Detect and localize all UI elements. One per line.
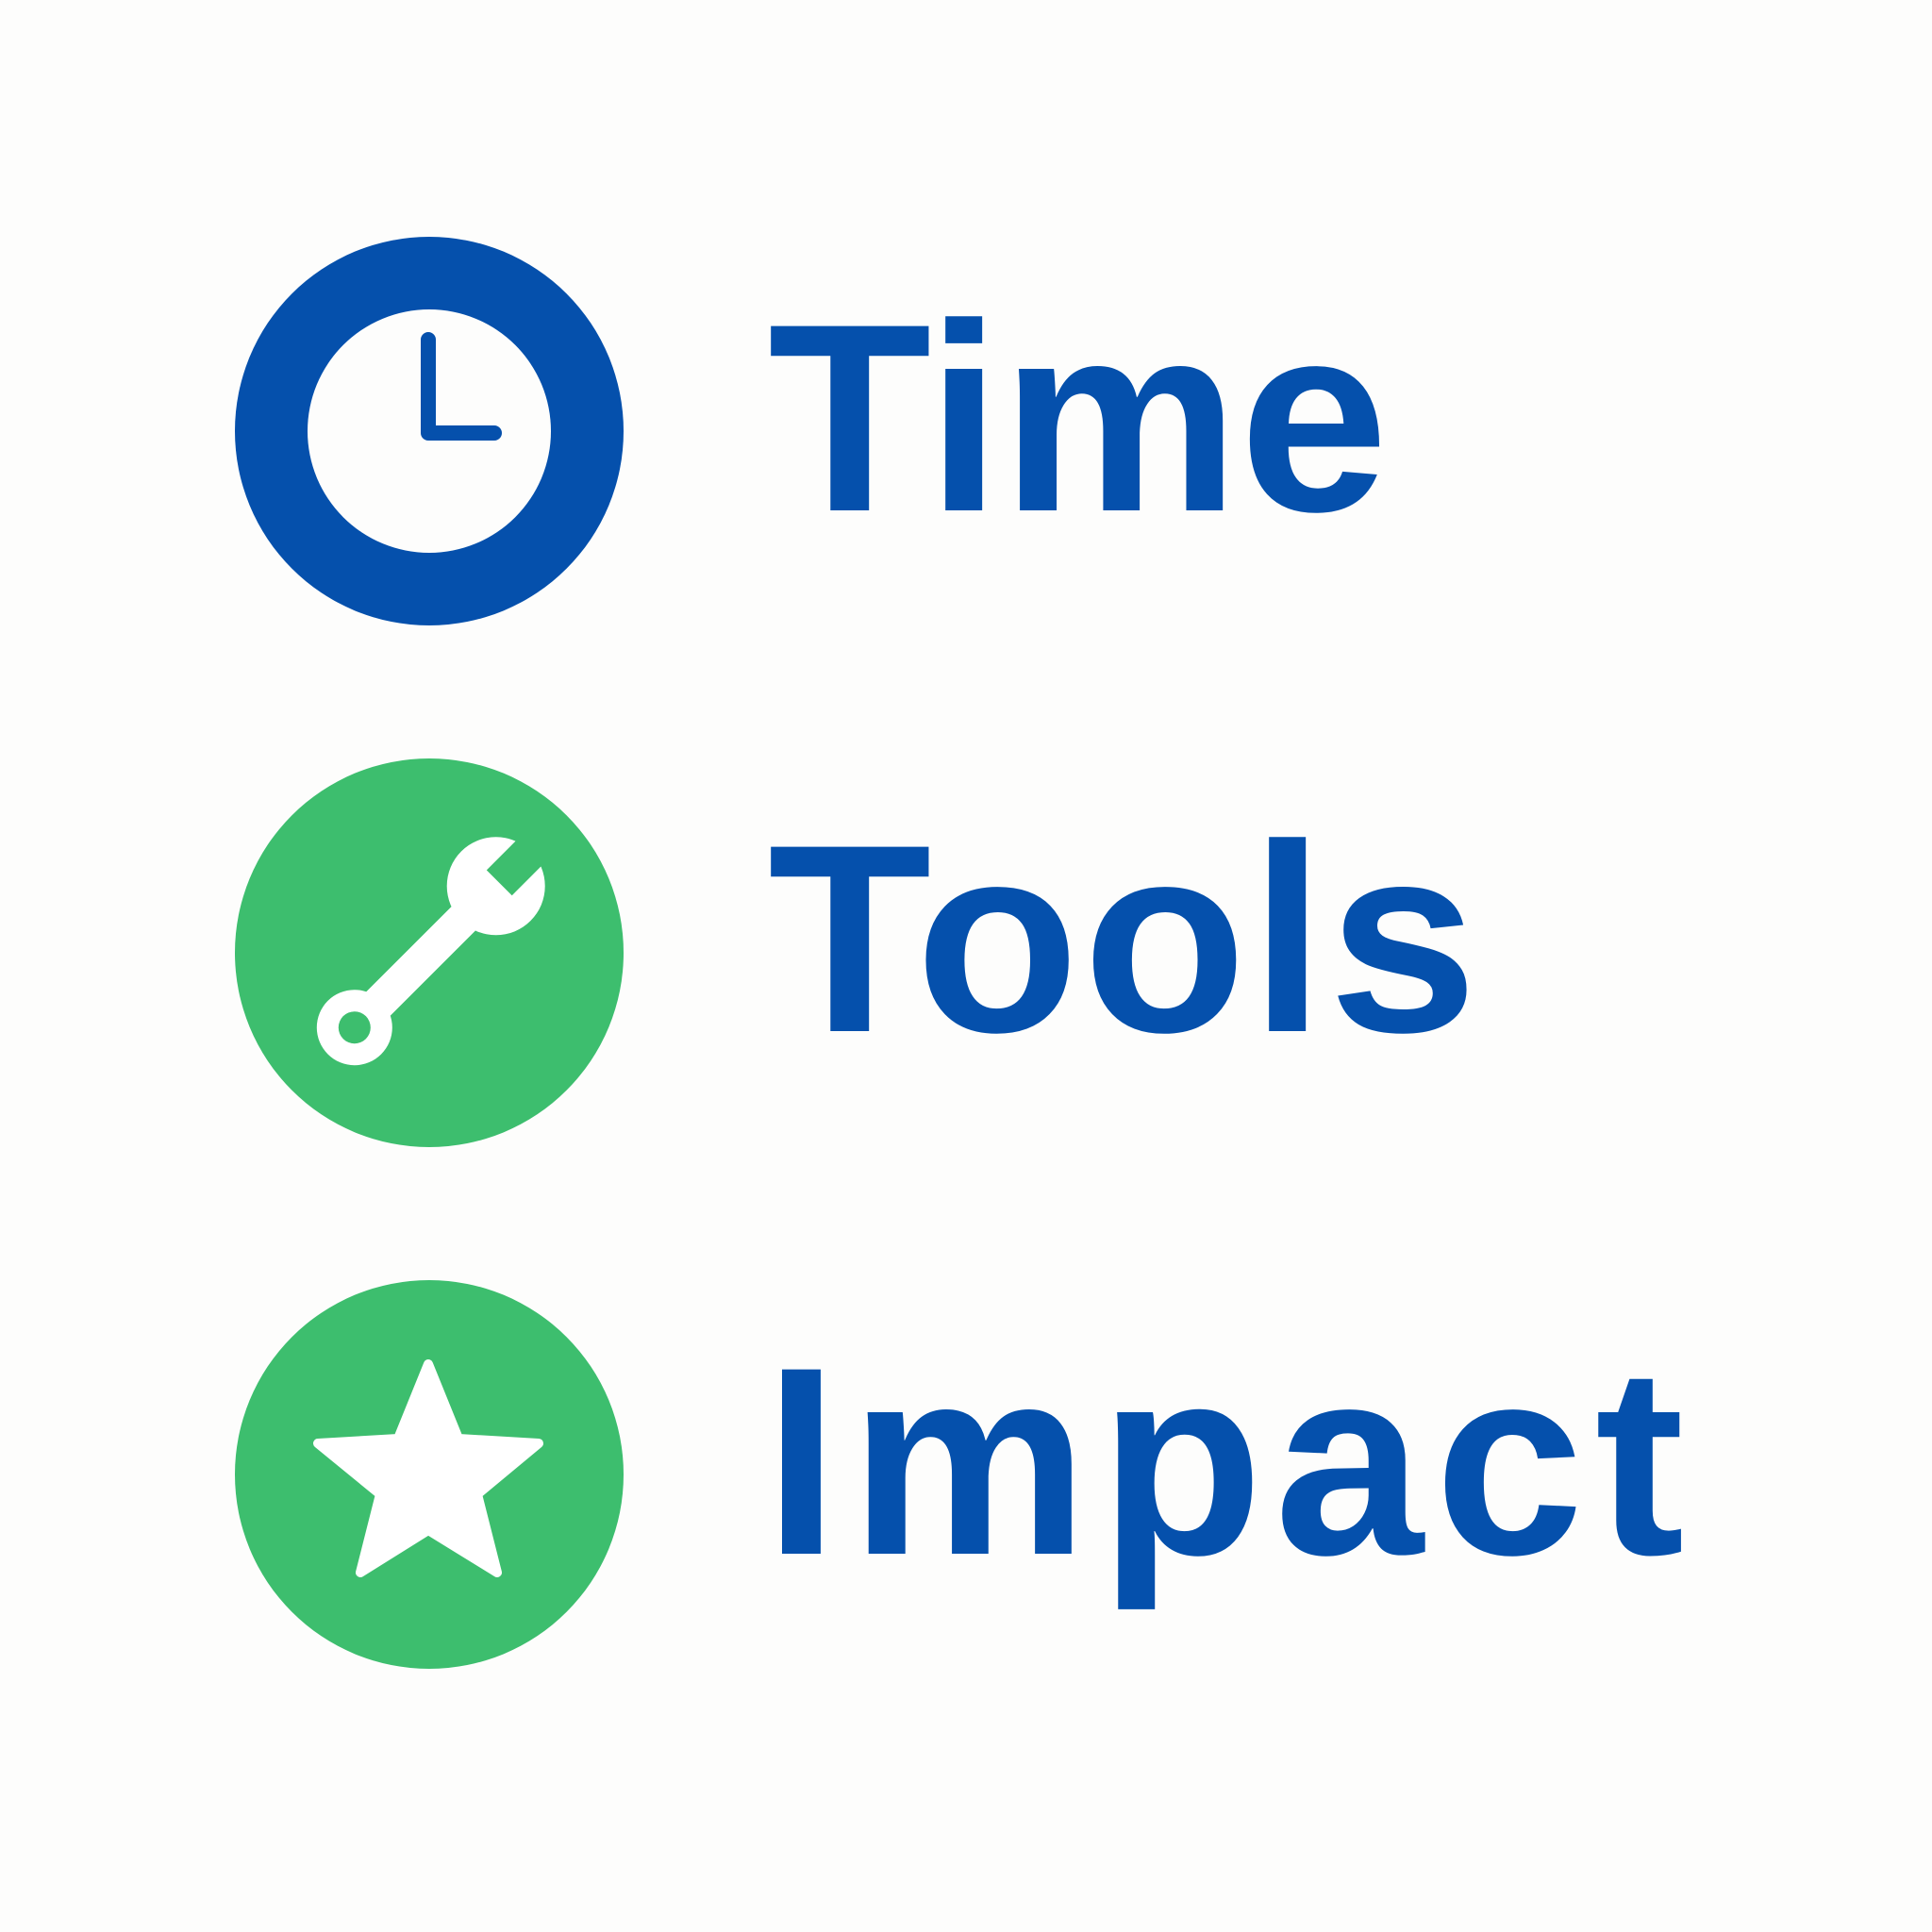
heading: Time: Time <box>768 269 1389 568</box>
icon: star <box>235 1280 624 1669</box>
icon: wrench <box>235 758 624 1147</box>
heading: Impact: Impact <box>764 1312 1695 1612</box>
heading: Tools: Tools <box>768 790 1481 1089</box>
icon: clock <box>235 237 624 625</box>
